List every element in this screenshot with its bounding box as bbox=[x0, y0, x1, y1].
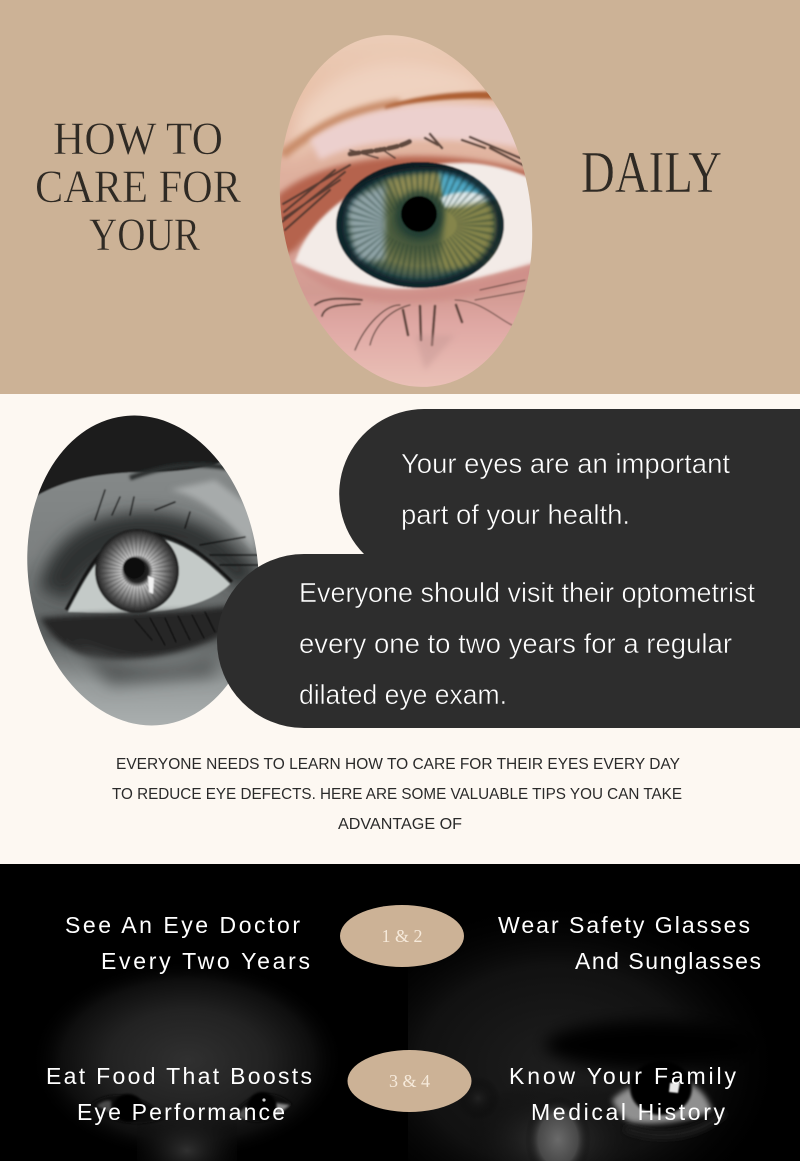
tip: wear safety glasses: Wear Safety Glasses bbox=[498, 912, 750, 938]
sclera bbox=[68, 537, 230, 613]
title: how to care for your: CARE FOR bbox=[35, 161, 242, 213]
tip: eat food that boosts: Eat Food That Boosts bbox=[46, 1063, 312, 1089]
text: visit optometrist: dilated eye exam. bbox=[299, 679, 507, 710]
oval badge: 3 and 4 bbox=[348, 1050, 472, 1112]
panel: dark rounded callout top bbox=[339, 409, 800, 554]
image: man's eye, right half bbox=[408, 890, 778, 1161]
lower lashes and shadow bbox=[40, 605, 240, 660]
tip: eat food that boosts bbox=[46, 1063, 312, 1125]
right eye bbox=[232, 1094, 292, 1122]
title: how to care for your bbox=[35, 113, 242, 261]
oval badge: 3 and 4: 3 & 4 bbox=[389, 1071, 430, 1091]
text: visit optometrist: Everyone should visit their optometrist bbox=[299, 577, 755, 608]
text: visit optometrist bbox=[299, 577, 755, 710]
text: visit optometrist: every one to two years for a regular bbox=[299, 628, 732, 659]
upper lid dark line bbox=[66, 533, 232, 610]
upper lid shadow bbox=[40, 513, 262, 600]
text: intro paragraph: ADVANTAGE OF bbox=[338, 816, 462, 833]
panel: tips background bbox=[0, 864, 800, 1161]
oval badge: 1 and 2 bbox=[340, 905, 464, 967]
title: how to care for your: HOW TO bbox=[53, 113, 223, 165]
panel: dark rounded callout bottom bbox=[217, 554, 800, 728]
left eye bbox=[90, 1095, 166, 1124]
tip: see an eye doctor: See An Eye Doctor bbox=[65, 912, 300, 938]
tip: wear safety glasses bbox=[498, 912, 761, 974]
sclera bbox=[295, 163, 540, 289]
iris bbox=[95, 529, 179, 613]
tip: know your family bbox=[509, 1063, 736, 1125]
oval badge: 1 and 2: 1 & 2 bbox=[381, 926, 423, 946]
iris bbox=[630, 1061, 692, 1115]
title: how to care for your: YOUR bbox=[89, 209, 201, 261]
image: black and white eye in oval bbox=[27, 416, 258, 726]
tip: see an eye doctor bbox=[65, 912, 310, 974]
text: eyes are important: part of your health. bbox=[401, 499, 630, 530]
upper lashes bbox=[282, 134, 530, 350]
panel: header band bbox=[0, 0, 800, 394]
text: intro paragraph bbox=[112, 756, 682, 833]
title: daily: DAILY bbox=[581, 139, 722, 205]
text: eyes are important: Your eyes are an important bbox=[401, 448, 730, 479]
tip: know your family: Know Your Family bbox=[509, 1063, 736, 1089]
text: intro paragraph: TO REDUCE EYE DEFECTS. HERE ARE SOME VALUABLE TIPS YOU CAN TAKE bbox=[112, 786, 682, 803]
eyebrow bbox=[38, 416, 220, 496]
eyelid crease bbox=[282, 103, 400, 155]
tip: see an eye doctor: Every Two Years bbox=[101, 948, 310, 974]
tip: eat food that boosts: Eye Performance bbox=[77, 1099, 285, 1125]
tip: know your family: Medical History bbox=[531, 1099, 726, 1125]
text: intro paragraph: EVERYONE NEEDS TO LEARN HOW TO CARE FOR THEIR EYES EVERY DAY bbox=[116, 756, 680, 773]
eye sclera bbox=[612, 1079, 712, 1124]
image: colour eye close-up in oval bbox=[280, 35, 532, 387]
image: woman's eyes, left half bbox=[30, 960, 345, 1161]
iris bbox=[336, 162, 504, 288]
text: eyes are important bbox=[401, 448, 730, 530]
tip: wear safety glasses: And Sunglasses bbox=[575, 948, 761, 974]
